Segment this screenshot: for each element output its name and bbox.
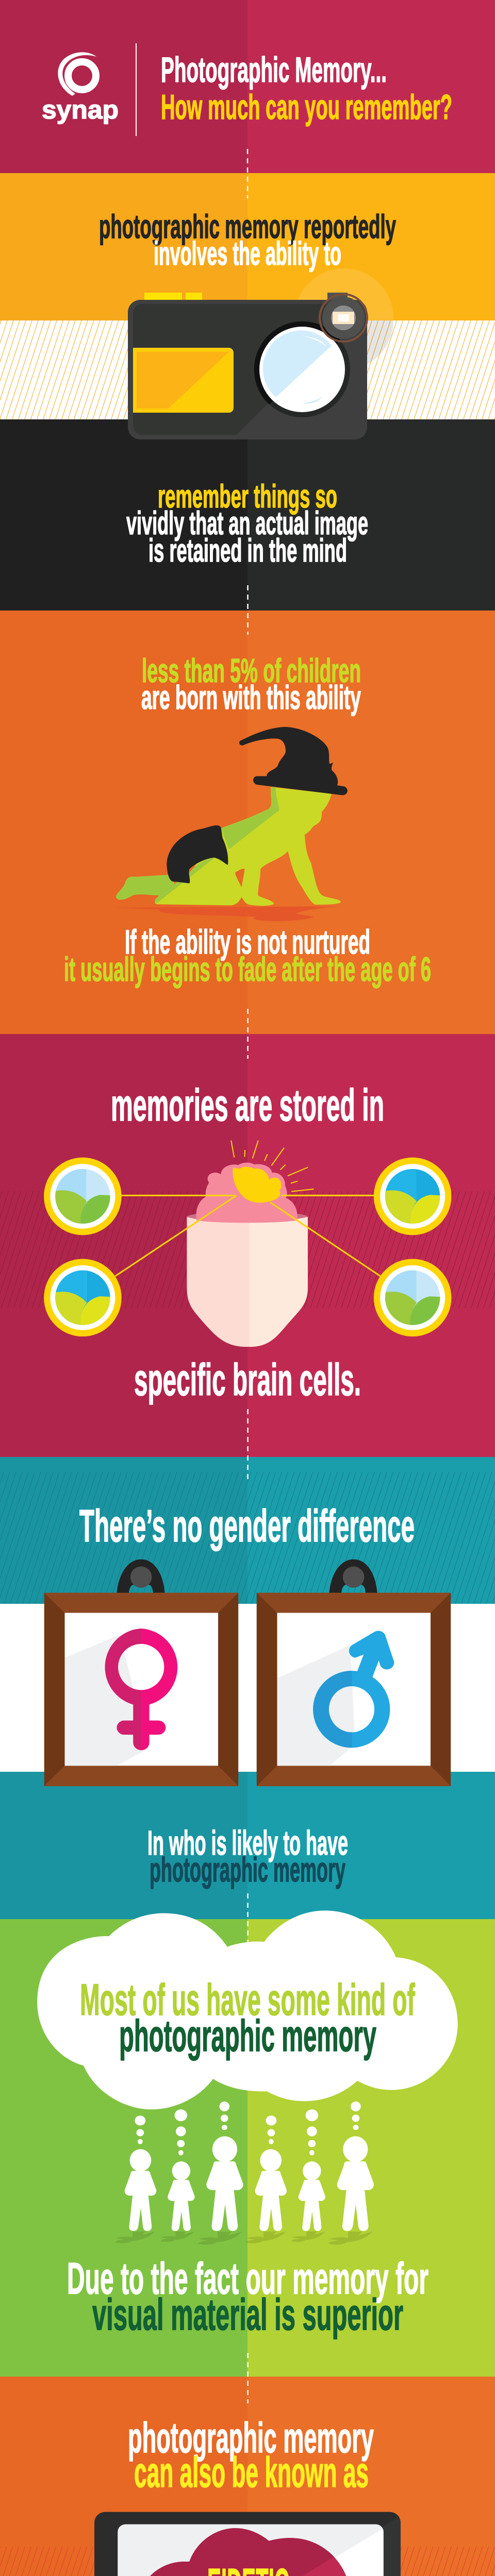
text: involves the ability: involves the ability to	[154, 235, 341, 272]
text: most of us	[80, 1975, 415, 2061]
person 2	[168, 2109, 195, 2231]
body shade	[155, 787, 279, 904]
head	[187, 1211, 308, 1347]
icon: male symbol	[313, 1631, 394, 1748]
person 3	[206, 2102, 243, 2231]
text: in who is likely	[147, 1824, 348, 1889]
back leg	[116, 875, 177, 900]
frame: female	[44, 1560, 238, 1786]
rays	[231, 1141, 314, 1192]
hat	[239, 727, 348, 795]
shadows	[114, 2231, 372, 2245]
person 4	[255, 2115, 287, 2231]
shadow	[114, 906, 341, 921]
memory circle top left	[44, 1158, 122, 1235]
text: less than 5%	[141, 652, 361, 716]
cloud: eidetic memory	[136, 2528, 351, 2576]
logo: synap	[42, 52, 119, 124]
connector lines	[115, 1195, 381, 1276]
orange band 2	[0, 2377, 495, 2576]
text: remember things: remember things so	[158, 479, 337, 515]
text: also known as	[128, 2414, 374, 2496]
memory circle top right	[374, 1158, 451, 1235]
person 6	[337, 2102, 374, 2231]
people with thought bubbles	[114, 2102, 374, 2245]
text: due to the fact	[67, 2254, 428, 2340]
yellow band	[0, 173, 495, 320]
icon: crawling baby in hat	[114, 727, 348, 921]
icon: tablet	[94, 2512, 401, 2576]
teal band	[0, 1457, 495, 1919]
icon: head with brain and memories	[44, 1141, 451, 1347]
body	[155, 787, 341, 906]
frame: male	[257, 1560, 451, 1786]
logo: synap: synap	[42, 95, 119, 124]
hatched white band	[0, 320, 495, 419]
header divider	[136, 43, 137, 136]
text: remember things: is retained in the mind	[148, 533, 347, 569]
dashed connectors	[247, 149, 249, 2576]
text: remember things	[126, 479, 368, 569]
crimson band	[0, 1034, 495, 1457]
orange band	[0, 611, 495, 1034]
text: if the ability	[64, 923, 431, 988]
gap between limbs	[235, 869, 244, 887]
title	[161, 50, 452, 127]
icon: camera	[128, 268, 393, 439]
icon: female symbol	[105, 1629, 177, 1750]
dark band	[0, 419, 495, 611]
cloud	[37, 1910, 458, 2109]
text: involves the ability	[99, 208, 396, 272]
memory circle bottom left	[44, 1259, 122, 1336]
header band	[0, 0, 495, 173]
memory circle bottom right	[374, 1259, 451, 1336]
diaper	[167, 825, 228, 883]
green band	[0, 1919, 495, 2377]
brain	[196, 1163, 298, 1223]
person 5	[299, 2109, 325, 2231]
highlighted cell	[233, 1167, 282, 1202]
person 1	[125, 2115, 156, 2231]
